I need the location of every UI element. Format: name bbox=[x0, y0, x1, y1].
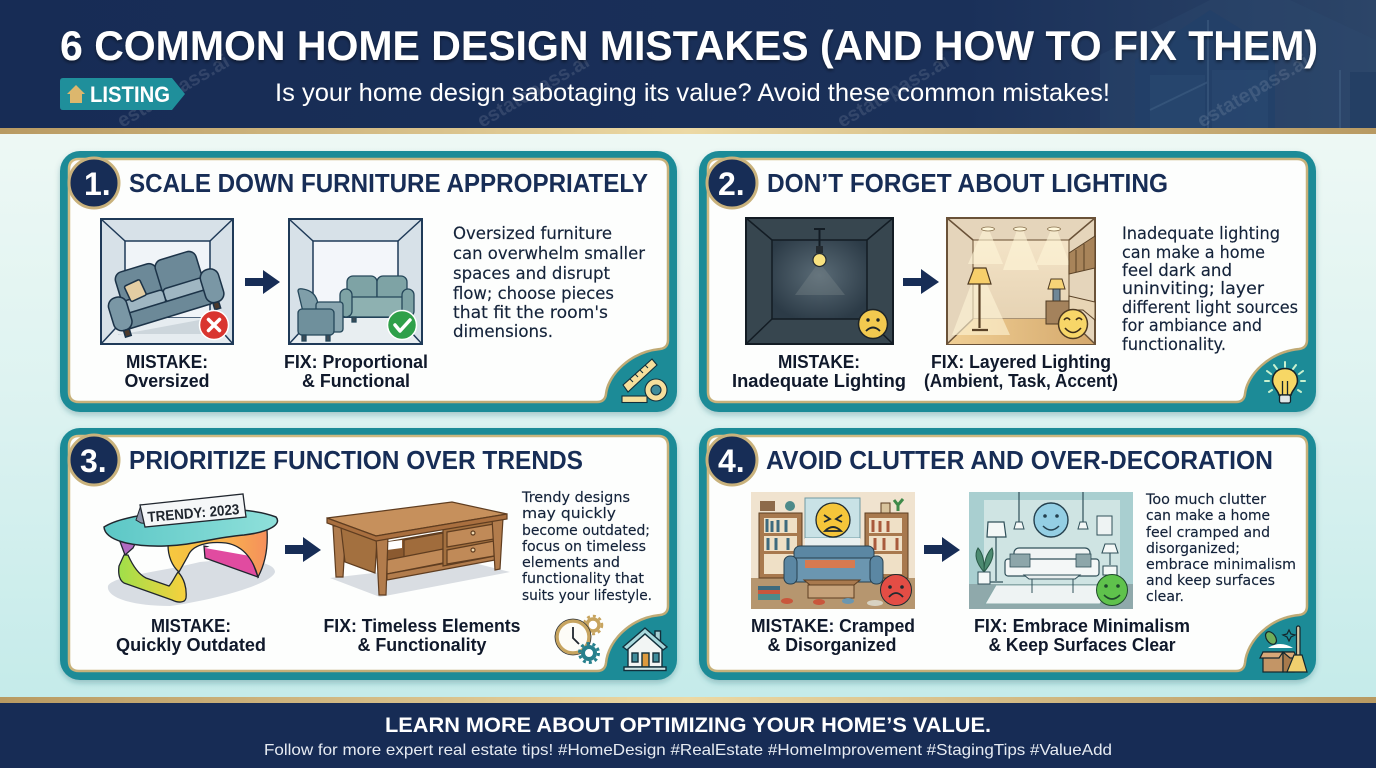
body text 1: can overwhelm smaller bbox=[453, 244, 645, 263]
body text 2: uninviting; layer bbox=[1122, 279, 1264, 298]
caption: fix 1: FIX: Proportional bbox=[284, 351, 428, 372]
number badge 4: 4. bbox=[718, 443, 745, 479]
body text 4: feel cramped and bbox=[1146, 525, 1270, 541]
icon: house bbox=[67, 85, 85, 103]
watermark bbox=[114, 50, 1313, 132]
watermark: estatepass.ai bbox=[834, 50, 953, 132]
footer bbox=[0, 703, 1376, 768]
footer hashtags: Follow for more expert real estate tips! #HomeDesign #RealEstate #HomeImprovement #StagingTips #ValueAdd bbox=[264, 742, 1112, 759]
illustration: oversized sofa room bbox=[100, 219, 233, 344]
panel 2: lighting bbox=[699, 151, 1316, 412]
number badge 3 bbox=[69, 435, 119, 485]
number badge 4 bbox=[707, 435, 757, 485]
body text 2: different light sources bbox=[1122, 298, 1298, 317]
caption: mistake 1: MISTAKE: bbox=[126, 351, 208, 372]
body text 3: become outdated; bbox=[522, 523, 650, 539]
body text 2: feel dark and bbox=[1122, 261, 1232, 280]
arrow 3 bbox=[285, 537, 321, 562]
caption: fix 4 bbox=[974, 615, 1190, 655]
heading 4: AVOID CLUTTER AND OVER-DECORATION bbox=[766, 445, 1273, 475]
gold divider bottom bbox=[0, 697, 1376, 703]
listing badge bbox=[60, 78, 185, 110]
body text 1: flow; choose pieces bbox=[453, 284, 614, 303]
body text 1: that fit the room's bbox=[453, 303, 608, 322]
panel 1: scale down furniture bbox=[60, 151, 677, 412]
illustration: cluttered room bbox=[751, 492, 915, 609]
body text 4: Too much clutter bbox=[1145, 492, 1266, 508]
arrow 2 bbox=[903, 269, 939, 294]
table sign: TRENDY: 2023 bbox=[147, 502, 240, 526]
number badge 2: 2. bbox=[718, 166, 745, 202]
arrow 4 bbox=[924, 537, 960, 562]
subtitle: Is your home design sabotaging its value? Avoid these common mistakes! bbox=[275, 79, 1110, 107]
caption: mistake 1: Oversized bbox=[124, 370, 210, 391]
caption: mistake 4: MISTAKE: Cramped bbox=[751, 615, 915, 636]
body text 1 bbox=[453, 224, 645, 341]
illustration: layered lighting room bbox=[947, 218, 1095, 344]
caption: fix 3: FIX: Timeless Elements bbox=[324, 615, 520, 636]
body text 2: can make a home bbox=[1122, 243, 1265, 262]
caption: mistake 4: & Disorganized bbox=[768, 634, 896, 655]
watermark: estatepass.ai bbox=[1194, 50, 1313, 132]
icon: house bbox=[623, 628, 667, 670]
caption: mistake 2: Inadequate Lighting bbox=[732, 370, 906, 391]
arrow 1 bbox=[245, 270, 280, 294]
icon: ruler and tape bbox=[622, 359, 667, 402]
gold divider top bbox=[0, 128, 1376, 134]
heading 2: DON’T FORGET ABOUT LIGHTING bbox=[767, 168, 1168, 198]
body text 2: Inadequate lighting bbox=[1122, 224, 1280, 243]
caption: mistake 1 bbox=[124, 351, 210, 391]
number badge 1 bbox=[69, 158, 119, 208]
caption: fix 1: & Functional bbox=[302, 370, 410, 391]
illustration: proportional furniture room bbox=[289, 219, 422, 344]
header banner bbox=[0, 0, 1376, 132]
icon: clock and gears bbox=[555, 616, 602, 662]
body text 4: clear. bbox=[1146, 589, 1184, 605]
watermark: estatepass.ai bbox=[114, 50, 233, 132]
body text 2: functionality. bbox=[1122, 335, 1226, 354]
number badge 2 bbox=[707, 158, 757, 208]
body text 4: and keep surfaces bbox=[1146, 573, 1275, 589]
number badge 1: 1. bbox=[84, 166, 111, 202]
illustration: wooden table bbox=[327, 502, 510, 597]
panel 4: clutter bbox=[699, 428, 1316, 680]
main title: 6 COMMON HOME DESIGN MISTAKES (AND HOW TO FIX THEM) bbox=[60, 22, 1318, 69]
caption: fix 4: FIX: Embrace Minimalism bbox=[974, 615, 1190, 636]
caption: fix 2 bbox=[924, 351, 1118, 391]
illustration: trendy table bbox=[104, 494, 278, 606]
caption: fix 2: FIX: Layered Lighting bbox=[931, 351, 1111, 372]
heading 3: PRIORITIZE FUNCTION OVER TRENDS bbox=[129, 445, 583, 475]
footer heading: LEARN MORE ABOUT OPTIMIZING YOUR HOME’S VALUE. bbox=[385, 714, 991, 737]
body text 4: disorganized; bbox=[1146, 541, 1240, 557]
body text 3: functionality that bbox=[522, 571, 645, 587]
caption: fix 4: & Keep Surfaces Clear bbox=[988, 634, 1176, 655]
caption: fix 3: & Functionality bbox=[358, 634, 487, 655]
listing badge: LISTING bbox=[90, 82, 170, 107]
body text 4 bbox=[1145, 492, 1296, 605]
illustration: dark room bbox=[746, 218, 893, 344]
illustration: minimalist room bbox=[969, 492, 1133, 609]
caption: fix 2: (Ambient, Task, Accent) bbox=[924, 370, 1118, 391]
body text 3: focus on timeless bbox=[522, 539, 646, 555]
body text 3: suits your lifestyle. bbox=[522, 588, 652, 604]
caption: mistake 3 bbox=[116, 615, 266, 655]
body text 3: may quickly bbox=[522, 506, 616, 522]
faint building backdrop bbox=[1100, 0, 1376, 129]
body text 1: dimensions. bbox=[453, 322, 553, 341]
body text 3: Trendy designs bbox=[521, 490, 630, 506]
caption: mistake 2 bbox=[732, 351, 906, 391]
caption: mistake 4 bbox=[751, 615, 915, 655]
panel 3: function over trends bbox=[60, 428, 677, 680]
caption: mistake 3: Quickly Outdated bbox=[116, 634, 266, 655]
body text 1: spaces and disrupt bbox=[453, 264, 611, 283]
body text 3 bbox=[521, 490, 652, 604]
body text 2: for ambiance and bbox=[1122, 316, 1262, 335]
heading 1: SCALE DOWN FURNITURE APPROPRIATELY bbox=[129, 168, 648, 198]
number badge 3: 3. bbox=[80, 443, 107, 479]
caption: mistake 3: MISTAKE: bbox=[151, 615, 231, 636]
caption: mistake 2: MISTAKE: bbox=[778, 351, 860, 372]
icon: box and broom bbox=[1260, 626, 1307, 672]
body text 2 bbox=[1122, 224, 1298, 354]
body text 1: Oversized furniture bbox=[453, 224, 612, 243]
watermark: estatepass.ai bbox=[474, 50, 593, 132]
caption: fix 3 bbox=[324, 615, 520, 655]
body text 4: can make a home bbox=[1146, 508, 1270, 524]
body text 3: elements and bbox=[522, 555, 620, 571]
body text 4: embrace minimalism bbox=[1146, 557, 1296, 573]
icon: light bulb bbox=[1265, 362, 1305, 403]
caption: fix 1 bbox=[284, 351, 428, 391]
